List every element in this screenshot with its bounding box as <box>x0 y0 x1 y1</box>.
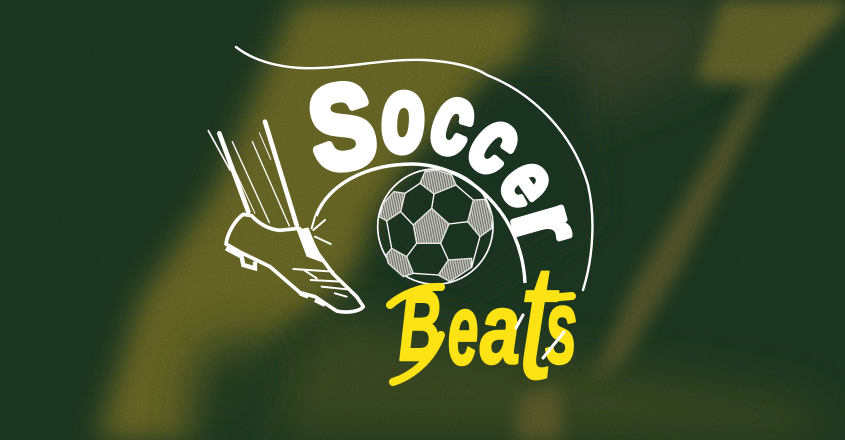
heading: Soccer: r <box>491 192 603 257</box>
heading: Soccer <box>301 54 603 257</box>
hatched ball panels <box>379 170 493 282</box>
boot tongue <box>297 227 325 263</box>
B flourish and tail <box>390 287 572 382</box>
heading: Beats: a <box>480 273 520 385</box>
heading: Soccer: c <box>418 61 491 177</box>
icon: soccer boot with speed lines <box>208 122 363 312</box>
icon: soccer ball <box>378 169 493 284</box>
heading: Beats: B <box>399 271 441 382</box>
white accent strokes over Beats <box>516 315 564 358</box>
outer swoosh arc <box>236 47 592 290</box>
boot outline <box>226 214 363 312</box>
speed lines <box>208 122 297 226</box>
heading: Beats <box>390 229 577 413</box>
heading: Beats: s <box>545 268 577 385</box>
heading: Soccer: c <box>450 90 543 194</box>
heading: Beats: e <box>448 275 478 386</box>
heading: Soccer: o <box>378 54 429 174</box>
heading: Beats: t <box>518 229 559 413</box>
inner arc over ball <box>316 164 525 283</box>
heading: Soccer: e <box>482 140 578 223</box>
laces <box>293 217 347 297</box>
heading: Soccer: S <box>301 59 384 196</box>
ball seams <box>387 183 480 275</box>
boot studs <box>226 248 325 305</box>
